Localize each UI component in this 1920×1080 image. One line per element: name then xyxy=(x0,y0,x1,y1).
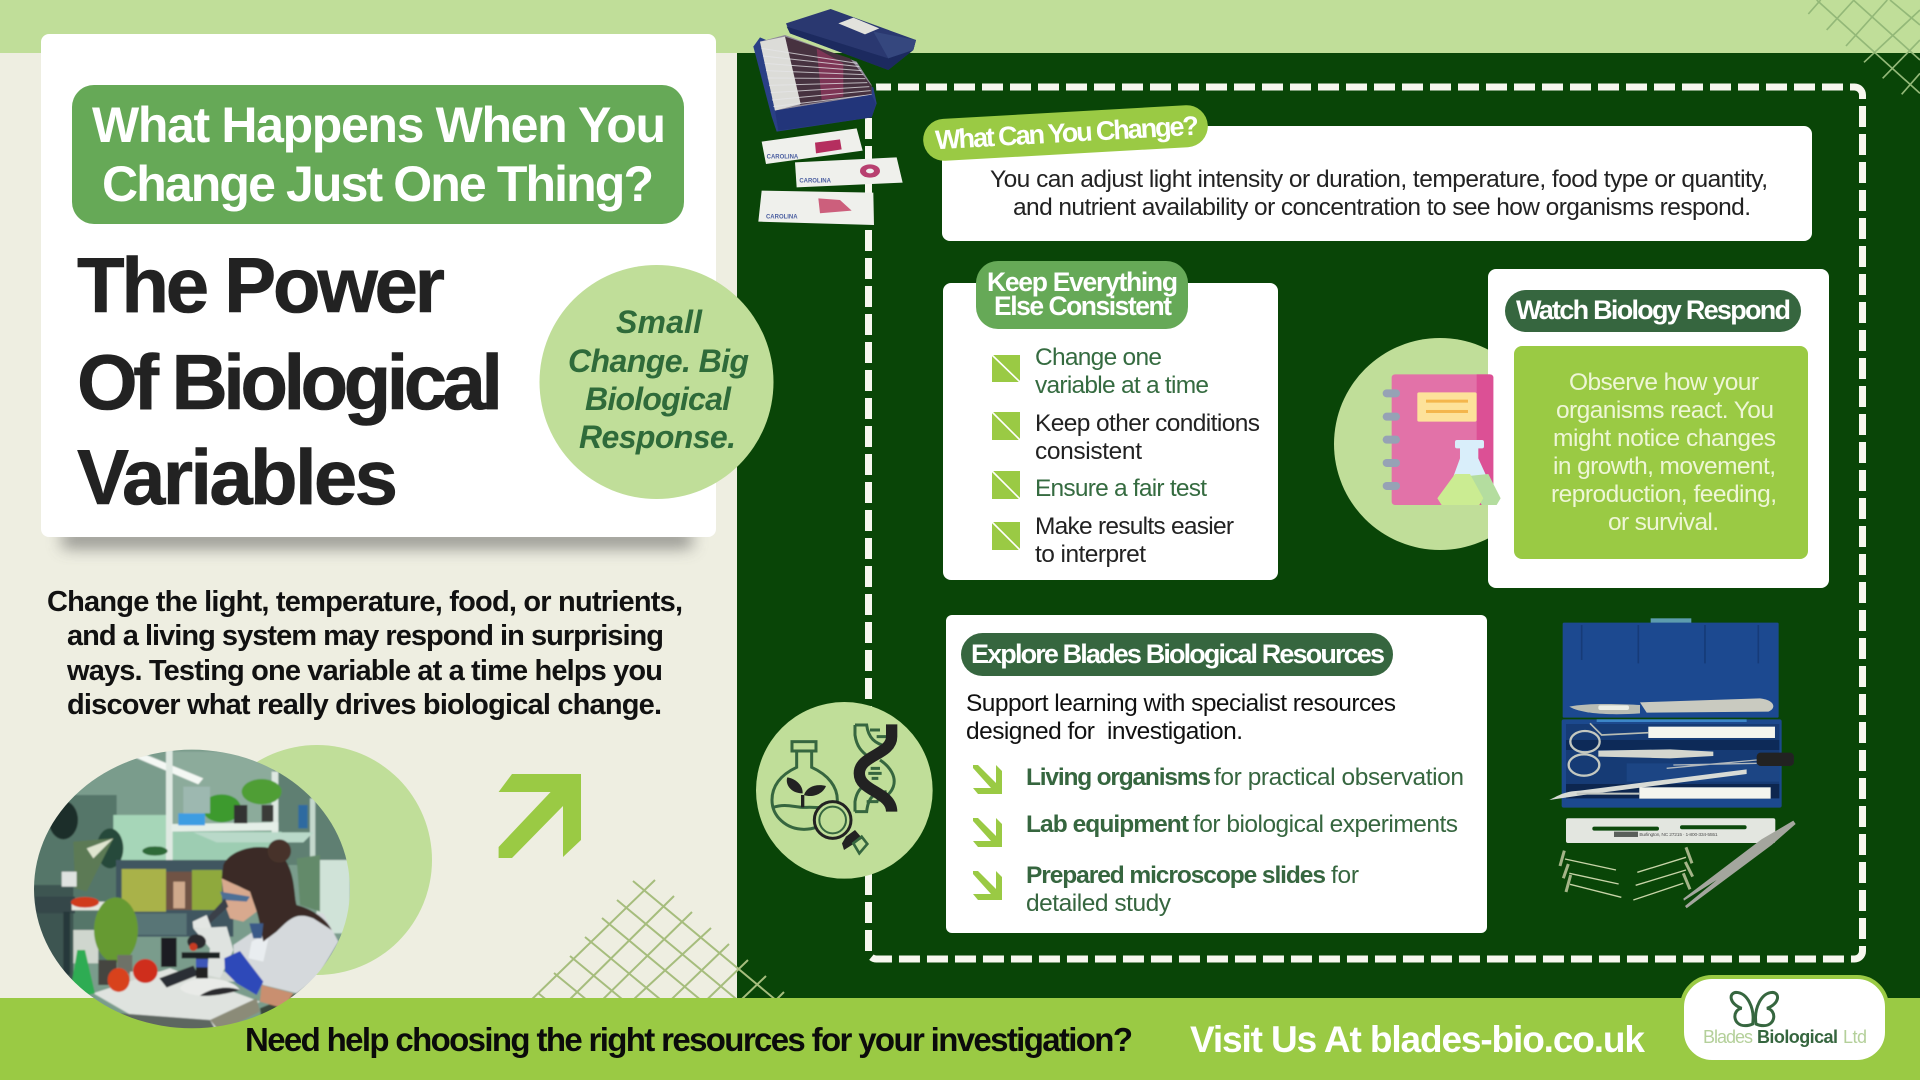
lattice: top right xyxy=(1808,0,1920,94)
pill heading: Else Consistent xyxy=(994,291,1172,321)
callout circle: Biological xyxy=(585,381,732,417)
body text: and nutrient availability or concentration to see how organisms respond. xyxy=(1013,194,1751,221)
list items: Lab equipment xyxy=(1026,811,1189,838)
list items: for xyxy=(1331,862,1359,889)
image: box of microscope slides: CAROLINA xyxy=(766,214,798,220)
pill heading xyxy=(976,261,1188,329)
pill: what can you change: What Can You Change? xyxy=(934,111,1200,155)
image: box of microscope slides: CAROLINA xyxy=(799,179,832,185)
checkbox item 4: Make results easier xyxy=(1035,513,1234,540)
logo wordmark: Blades xyxy=(1703,1027,1753,1047)
intro paragraph xyxy=(47,586,683,721)
intro text xyxy=(966,690,1396,745)
panel: what can you change xyxy=(942,126,1812,241)
checklist xyxy=(992,344,1260,568)
body text xyxy=(990,166,1768,221)
green text box xyxy=(1514,346,1808,559)
list items: for biological experiments xyxy=(1193,811,1458,838)
heading pill: Change Just One Thing? xyxy=(102,156,654,212)
panel: title card xyxy=(41,34,716,537)
callout circle: Small xyxy=(616,304,703,340)
list items: Living organisms xyxy=(1026,764,1211,791)
pill heading xyxy=(1505,290,1801,332)
circle behind notebook xyxy=(1334,338,1546,550)
logo xyxy=(1682,977,1887,1062)
green text box: reproduction, feeding, xyxy=(1551,481,1777,508)
dashed border xyxy=(868,87,1862,959)
arrow: up right xyxy=(499,774,581,858)
heading pill xyxy=(72,85,684,224)
lattice: bottom xyxy=(525,880,784,1020)
footer question: Need help choosing the right resources for your investigation? xyxy=(245,1021,1133,1058)
title: The Power xyxy=(77,241,445,329)
callout circle: Change. Big xyxy=(568,343,749,379)
checkbox item 2: consistent xyxy=(1035,438,1142,465)
intro paragraph: and a living system may respond in surprising xyxy=(67,620,664,652)
image: box of microscope slides xyxy=(753,9,916,225)
checkbox item 4 xyxy=(992,513,1234,568)
body text: You can adjust light intensity or duration, temperature, food type or quantity, xyxy=(990,166,1768,193)
photo: scientist at microscope xyxy=(30,745,360,1035)
intro text: designed for investigation. xyxy=(966,718,1243,745)
checkbox item 2: Keep other conditions xyxy=(1035,410,1260,437)
intro paragraph: discover what really drives biological change. xyxy=(67,689,662,721)
checkbox item 3 xyxy=(992,471,1207,502)
checkbox item 1: variable at a time xyxy=(1035,372,1209,399)
list items: for practical observation xyxy=(1214,764,1464,791)
intro text: Support learning with specialist resources xyxy=(966,690,1396,717)
green text box: organisms react. You xyxy=(1556,397,1774,424)
list items xyxy=(1026,764,1464,917)
intro paragraph: ways. Testing one variable at a time helps you xyxy=(66,655,663,687)
title: Of Biological xyxy=(77,338,503,426)
logo wordmark xyxy=(1703,1027,1867,1047)
panel: explore blades biological resources xyxy=(946,615,1487,933)
title: Variables xyxy=(77,433,398,521)
icon: notebook and flask xyxy=(1383,374,1501,505)
white card shadow xyxy=(62,530,692,548)
green circle behind photo xyxy=(202,745,432,975)
callout circle xyxy=(540,265,774,499)
checkbox item 2 xyxy=(992,410,1260,465)
checkbox item 4: to interpret xyxy=(1035,541,1146,568)
image: dissection kit xyxy=(1549,618,1796,908)
list items: detailed study xyxy=(1026,890,1172,917)
heading pill: What Happens When You xyxy=(92,97,666,153)
green text box: might notice changes xyxy=(1553,425,1776,452)
icon: butterfly xyxy=(1731,992,1778,1026)
pill heading: Explore Blades Biological Resources xyxy=(971,639,1385,669)
green text box: or survival. xyxy=(1608,509,1719,536)
callout circle: Response. xyxy=(579,419,736,455)
top band xyxy=(0,0,1920,53)
logo wordmark: Biological xyxy=(1757,1027,1838,1047)
icon: science circle xyxy=(756,702,933,879)
panel: watch biology respond xyxy=(1488,269,1829,588)
green text box: Observe how your xyxy=(1569,369,1759,396)
intro paragraph: Change the light, temperature, food, or nutrients, xyxy=(47,586,683,618)
checkbox item 1: Change one xyxy=(1035,344,1162,371)
pill heading: Keep Everything xyxy=(987,267,1178,297)
title xyxy=(77,241,503,521)
checkbox item 1 xyxy=(992,344,1209,399)
checkbox item 3: Ensure a fair test xyxy=(1035,475,1207,502)
logo wordmark: Ltd xyxy=(1843,1027,1867,1047)
pill heading: Watch Biology Respond xyxy=(1516,295,1791,325)
bottom band xyxy=(0,998,1920,1080)
dark green panel xyxy=(737,53,1920,999)
list items: Prepared microscope slides xyxy=(1026,862,1326,889)
pill heading xyxy=(961,633,1393,676)
arrow bullets xyxy=(973,765,1002,900)
green text box: in growth, movement, xyxy=(1553,453,1776,480)
footer call to action: Visit Us At blades-bio.co.uk xyxy=(1190,1019,1645,1060)
panel: keep everything else consistent xyxy=(943,261,1278,580)
image: box of microscope slides: CAROLINA xyxy=(767,155,799,161)
image: dissection kit: Burlington, NC 27215 · 1-800-334-5551 xyxy=(1639,832,1718,838)
